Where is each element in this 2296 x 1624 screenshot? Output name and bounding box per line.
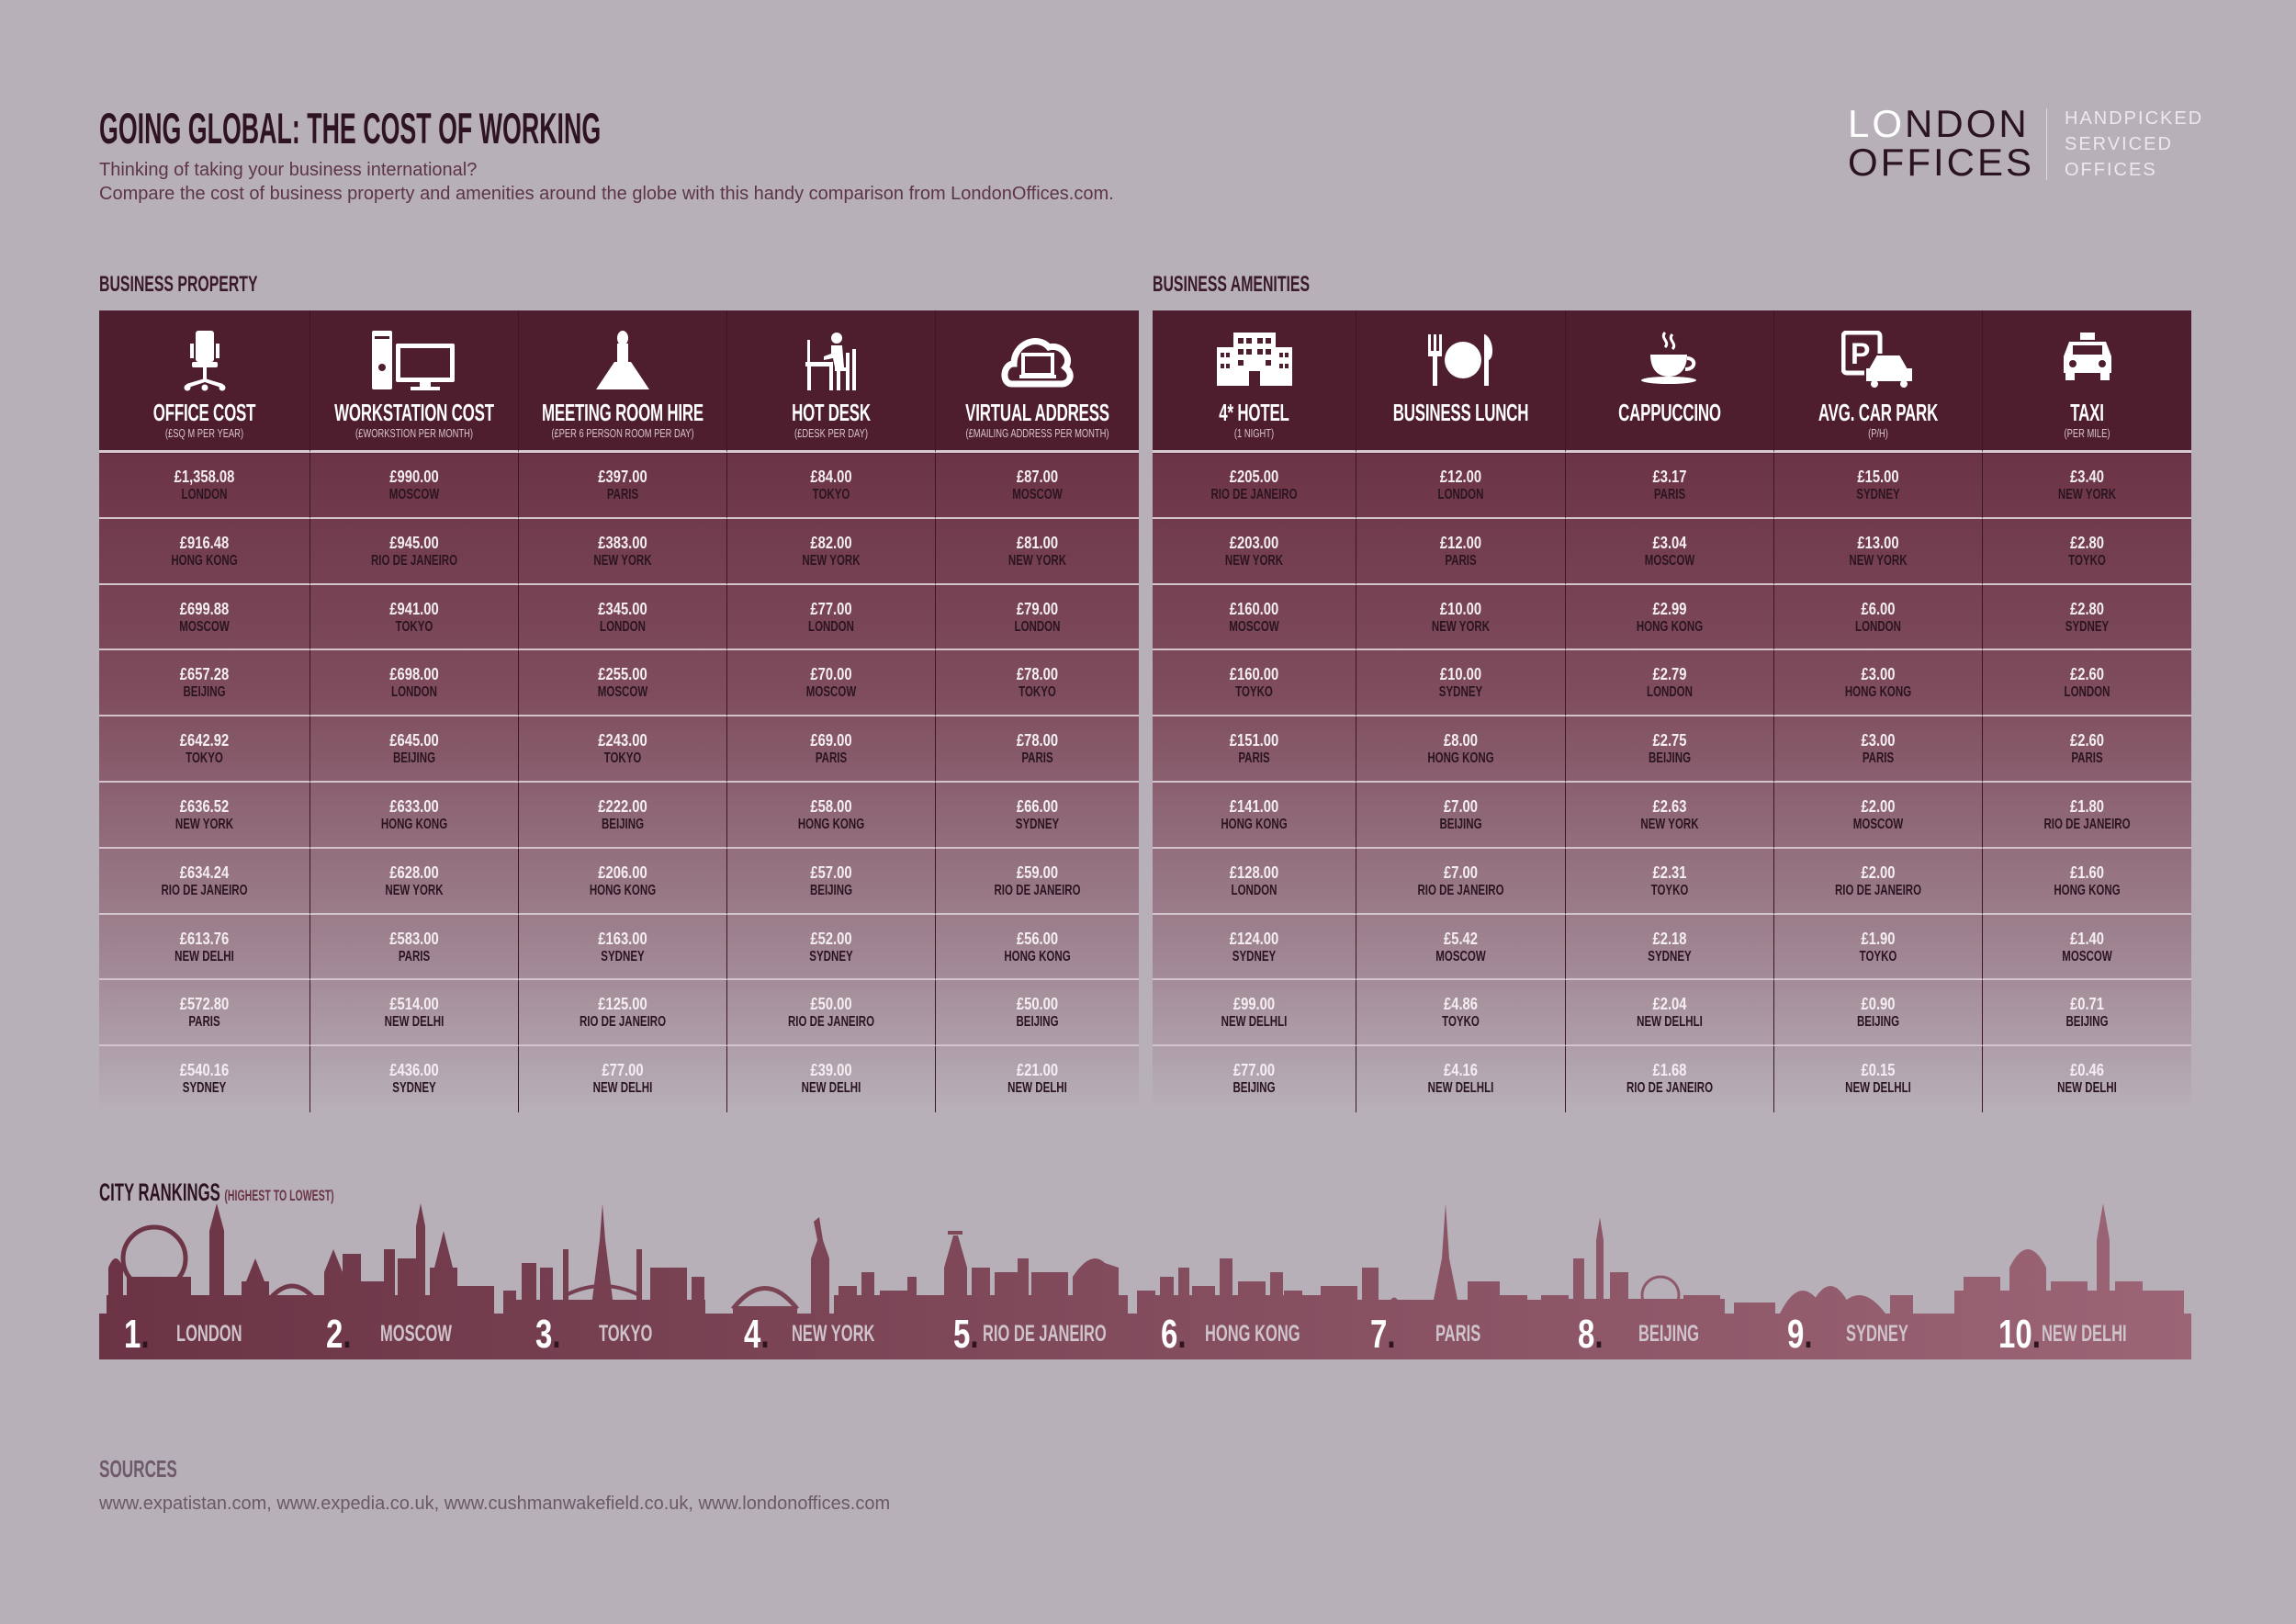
rankings labels: HONG KONG <box>1205 1321 1300 1347</box>
sources text: www.expatistan.com, www.expedia.co.uk, www.cushmanwakefield.co.uk, www.londonoffices.com <box>99 1494 890 1514</box>
table: business property: MOSCOW <box>806 684 856 700</box>
table: business amenities: £2.60 <box>2070 731 2104 750</box>
table: business amenities: £0.90 <box>1862 995 1895 1013</box>
table: business property: £77.00 <box>810 600 852 618</box>
table: business property: £79.00 <box>1017 600 1058 618</box>
table: business property: £698.00 <box>389 665 439 683</box>
table: business property: £645.00 <box>389 731 439 750</box>
table: business property: HONG KONG <box>381 817 447 832</box>
header: 4* hotel: (1 NIGHT) <box>1234 426 1274 440</box>
table: business amenities <box>1153 310 2191 1112</box>
header: virtual address <box>936 310 1139 453</box>
logo: LONDON <box>1848 102 2030 145</box>
header: car park: P <box>1851 337 1870 370</box>
skyline city ranking band <box>99 1203 2191 1359</box>
table: business amenities: £2.00 <box>1862 797 1895 816</box>
table: business property: MOSCOW <box>389 487 439 502</box>
table: business property: £56.00 <box>1017 930 1058 948</box>
table: business amenities: £160.00 <box>1230 600 1278 618</box>
table: business property: £222.00 <box>598 797 647 816</box>
table: business property: £50.00 <box>810 995 852 1013</box>
table: business amenities: £124.00 <box>1230 930 1278 948</box>
table: business property: £945.00 <box>389 534 439 552</box>
table: business property: £77.00 <box>602 1061 644 1079</box>
table: business property: RIO DE JANEIRO <box>580 1014 666 1030</box>
table: business amenities: BEIJING <box>1649 750 1691 766</box>
table: business amenities: NEW DELHLI <box>1221 1014 1287 1030</box>
table: business amenities: £7.00 <box>1444 863 1478 882</box>
table: business amenities: £2.04 <box>1653 995 1686 1013</box>
table: business amenities: £2.63 <box>1653 797 1686 816</box>
table: business property: TOKYO <box>813 487 850 502</box>
table: business amenities: RIO DE JANEIRO <box>1210 487 1298 502</box>
rankings labels: 5. <box>953 1312 979 1357</box>
header: business lunch <box>1356 310 1566 453</box>
table: business property: NEW DELHI <box>1007 1080 1067 1096</box>
table: business property: £125.00 <box>598 995 647 1013</box>
table: business property: £82.00 <box>810 534 852 552</box>
table: business amenities: £0.15 <box>1862 1061 1895 1079</box>
rankings labels: 8. <box>1578 1312 1604 1357</box>
table: business amenities: BEIJING <box>1857 1014 1899 1030</box>
table: business amenities: £2.99 <box>1653 600 1686 618</box>
table: business property: £69.00 <box>810 731 852 750</box>
table: business property: £436.00 <box>389 1061 439 1079</box>
table: business amenities: HONG KONG <box>1637 619 1703 635</box>
table: business property: SYDNEY <box>1016 817 1059 832</box>
table: business amenities: £2.80 <box>2070 600 2104 618</box>
table: business amenities: NEW DELHI <box>2057 1080 2117 1096</box>
table: business property: LONDON <box>1015 619 1060 635</box>
table: business property: £78.00 <box>1017 665 1058 683</box>
rankings labels: NEW YORK <box>792 1321 874 1347</box>
table: business amenities: £2.18 <box>1653 930 1686 948</box>
rankings labels: PARIS <box>1435 1321 1480 1347</box>
table: business property: BEIJING <box>1016 1014 1059 1030</box>
table: business amenities: £15.00 <box>1857 468 1899 486</box>
table: business amenities: £3.04 <box>1653 534 1686 552</box>
rankings labels: 3. <box>535 1312 561 1357</box>
header: meeting room hire: MEETING ROOM HIRE <box>542 399 703 426</box>
table: business amenities: MOSCOW <box>2062 949 2112 964</box>
table: business property: £583.00 <box>389 930 439 948</box>
header: workstation cost <box>310 310 519 453</box>
table: business amenities: £0.71 <box>2070 995 2104 1013</box>
table: business property: LONDON <box>182 487 227 502</box>
table: business amenities: £3.00 <box>1862 665 1895 683</box>
table: business amenities: PARIS <box>1654 487 1685 502</box>
header: meeting room hire: (£PER 6 PERSON ROOM PER DAY) <box>551 426 694 440</box>
table: business amenities: PARIS <box>1863 750 1894 766</box>
table: business property: £243.00 <box>598 731 647 750</box>
table: business property: £633.00 <box>389 797 439 816</box>
table: business amenities: NEW YORK <box>2058 487 2116 502</box>
table: business property: £87.00 <box>1017 468 1058 486</box>
table: business amenities: £99.00 <box>1233 995 1275 1013</box>
header: workstation cost: (£WORKSTION PER MONTH) <box>355 426 473 440</box>
table: business amenities: £13.00 <box>1857 534 1899 552</box>
table: business amenities: £128.00 <box>1230 863 1278 882</box>
header: virtual address: (£MAILING ADDRESS PER MONTH) <box>965 426 1109 440</box>
rankings labels: RIO DE JANEIRO <box>983 1321 1107 1347</box>
table: business property: £628.00 <box>389 863 439 882</box>
table: business amenities: PARIS <box>2071 750 2103 766</box>
table: business amenities: £1.68 <box>1653 1061 1686 1079</box>
table: business amenities: £5.42 <box>1444 930 1478 948</box>
table: business property: HONG KONG <box>1004 949 1071 964</box>
header: virtual address: VIRTUAL ADDRESS <box>965 399 1109 426</box>
table: business property <box>99 310 1139 1112</box>
table: business property: £206.00 <box>598 863 647 882</box>
table: business amenities: £1.90 <box>1862 930 1895 948</box>
table: business property: NEW YORK <box>1008 553 1066 569</box>
table: business property: SYDNEY <box>601 949 645 964</box>
title: GOING GLOBAL: THE COST OF WORKING <box>99 104 601 152</box>
header: hot desk: HOT DESK <box>792 399 871 426</box>
table: business property: £59.00 <box>1017 863 1058 882</box>
logo: OFFICES <box>2065 160 2157 180</box>
table: business amenities: TOYKO <box>1651 883 1688 898</box>
header: office cost <box>99 310 310 453</box>
table: business property: £52.00 <box>810 930 852 948</box>
table: business amenities: LONDON <box>1647 684 1693 700</box>
table: business property: £81.00 <box>1017 534 1058 552</box>
table: business amenities: PARIS <box>1445 553 1477 569</box>
table: business amenities: HONG KONG <box>1221 817 1288 832</box>
table: business amenities: NEW YORK <box>1432 619 1490 635</box>
table: business amenities: PARIS <box>1238 750 1270 766</box>
table: business property: £255.00 <box>598 665 647 683</box>
table: business amenities: LONDON <box>1232 883 1277 898</box>
header: cappuccino <box>1566 310 1774 453</box>
table: business amenities: SYDNEY <box>1232 949 1276 964</box>
logo <box>1848 102 2203 184</box>
table: business amenities: £77.00 <box>1233 1061 1275 1079</box>
table: business amenities: SYDNEY <box>2065 619 2109 635</box>
table: business property: £66.00 <box>1017 797 1058 816</box>
table: business amenities: SYDNEY <box>1439 684 1482 700</box>
table: business amenities: SYDNEY <box>1648 949 1692 964</box>
rankings labels: SYDNEY <box>1846 1321 1908 1347</box>
header: hot desk: (£DESK PER DAY) <box>794 426 868 440</box>
header: office cost: OFFICE COST <box>153 399 255 426</box>
table: business amenities: £12.00 <box>1440 534 1481 552</box>
table: business amenities: HONG KONG <box>1845 684 1911 700</box>
header: workstation cost: WORKSTATION COST <box>334 399 494 426</box>
table: business amenities: TOYKO <box>1860 949 1896 964</box>
table: business amenities: £4.16 <box>1444 1061 1478 1079</box>
logo: OFFICES <box>1848 141 2034 184</box>
table: business amenities: £2.80 <box>2070 534 2104 552</box>
table: business amenities: £8.00 <box>1444 731 1478 750</box>
table: business property: BEIJING <box>602 817 644 832</box>
table: business amenities: NEW YORK <box>1849 553 1908 569</box>
table: business amenities: £2.31 <box>1653 863 1686 882</box>
table: business amenities: £160.00 <box>1230 665 1278 683</box>
table: business amenities: HONG KONG <box>2054 883 2121 898</box>
table: business amenities: MOSCOW <box>1645 553 1694 569</box>
table: business property: HONG KONG <box>798 817 864 832</box>
table: business property: £57.00 <box>810 863 852 882</box>
table: business amenities: £12.00 <box>1440 468 1481 486</box>
rankings labels: 2. <box>326 1312 352 1357</box>
table: business property: NEW YORK <box>385 883 444 898</box>
table: business property: £21.00 <box>1017 1061 1058 1079</box>
table: business property: NEW DELHI <box>385 1014 444 1030</box>
table: business property: £990.00 <box>389 468 439 486</box>
table: business property: £397.00 <box>598 468 647 486</box>
header: 4* hotel <box>1153 310 1356 453</box>
table: business property: £50.00 <box>1017 995 1058 1013</box>
table: business amenities: £2.00 <box>1862 863 1895 882</box>
table: business property: HONG KONG <box>590 883 656 898</box>
table: business property: RIO DE JANEIRO <box>161 883 248 898</box>
header: office cost: (£SQ M PER YEAR) <box>165 426 243 440</box>
table: business property: £613.76 <box>180 930 229 948</box>
table: business property: SYDNEY <box>392 1080 436 1096</box>
table: business property: NEW DELHI <box>174 949 234 964</box>
table: business amenities: £2.75 <box>1653 731 1686 750</box>
rankings labels: 7. <box>1370 1312 1396 1357</box>
table: business property: RIO DE JANEIRO <box>994 883 1081 898</box>
table: business property: £916.48 <box>180 534 229 552</box>
rankings labels: TOKYO <box>599 1321 652 1347</box>
table: business amenities: TOYKO <box>2068 553 2106 569</box>
table: business amenities: £1.40 <box>2070 930 2104 948</box>
table: business amenities: RIO DE JANEIRO <box>1835 883 1921 898</box>
table: business property: MOSCOW <box>598 684 647 700</box>
table: business amenities: BEIJING <box>1439 817 1482 832</box>
table: business property: SYDNEY <box>809 949 853 964</box>
rankings labels <box>124 1312 2127 1357</box>
table: business property: £39.00 <box>810 1061 852 1079</box>
rankings labels: BEIJING <box>1638 1321 1699 1347</box>
logo: SERVICED <box>2065 134 2173 154</box>
table: business amenities: MOSCOW <box>1229 619 1279 635</box>
table: business property: £941.00 <box>389 600 439 618</box>
table: business amenities: BEIJING <box>1232 1080 1276 1096</box>
table: business property: TOKYO <box>604 750 641 766</box>
table: business amenities: £2.60 <box>2070 665 2104 683</box>
header: taxi <box>1983 310 2191 453</box>
table: business property: £345.00 <box>598 600 647 618</box>
table: business property: PARIS <box>816 750 847 766</box>
table: business amenities: £0.46 <box>2070 1061 2104 1079</box>
table: business amenities: £6.00 <box>1862 600 1895 618</box>
table: business amenities: £141.00 <box>1230 797 1278 816</box>
table: business amenities: RIO DE JANEIRO <box>1626 1080 1713 1096</box>
header: taxi: (PER MILE) <box>2065 426 2110 440</box>
table: business property: RIO DE JANEIRO <box>788 1014 874 1030</box>
table: business amenities: £1.80 <box>2070 797 2104 816</box>
subtitle: Compare the cost of business property and amenities around the globe with this handy comparison from LondonOffices.com. <box>99 184 1114 204</box>
table: business property: BEIJING <box>183 684 226 700</box>
table: business amenities: SYDNEY <box>1856 487 1900 502</box>
header: meeting room hire <box>519 310 727 453</box>
table: business amenities: MOSCOW <box>1853 817 1903 832</box>
table: business amenities: £3.17 <box>1653 468 1686 486</box>
table: business property: £572.80 <box>180 995 229 1013</box>
table: business amenities: £151.00 <box>1230 731 1278 750</box>
table: business property: LONDON <box>808 619 854 635</box>
table: business amenities: HONG KONG <box>1427 750 1494 766</box>
table: business amenities: £203.00 <box>1230 534 1278 552</box>
table: business amenities: £4.86 <box>1444 995 1478 1013</box>
header: car park <box>1774 310 1983 453</box>
table: business amenities: MOSCOW <box>1435 949 1486 964</box>
subtitle: Thinking of taking your business international? <box>99 160 477 180</box>
table: business amenities: NEW DELHLI <box>1428 1080 1493 1096</box>
table: business property: TOKYO <box>186 750 223 766</box>
table: business amenities: LONDON <box>2065 684 2110 700</box>
table: business property: MOSCOW <box>1012 487 1063 502</box>
subtitle <box>99 160 1114 204</box>
header: cappuccino: CAPPUCCINO <box>1618 399 1721 426</box>
table: business property: £383.00 <box>598 534 647 552</box>
table: business property: LONDON <box>600 619 646 635</box>
table: business property: NEW YORK <box>593 553 652 569</box>
table: business property: NEW DELHI <box>593 1080 652 1096</box>
table: business amenities: NEW YORK <box>1640 817 1699 832</box>
table: business amenities: LONDON <box>1438 487 1483 502</box>
rankings labels: 10. <box>1998 1312 2041 1357</box>
table: business property: HONG KONG <box>171 553 238 569</box>
logo: HANDPICKED <box>2065 108 2203 129</box>
table: business property: £78.00 <box>1017 731 1058 750</box>
table: business property: PARIS <box>607 487 638 502</box>
table: business amenities: £10.00 <box>1440 665 1481 683</box>
table: business property: NEW YORK <box>802 553 861 569</box>
header: taxi: TAXI <box>2070 399 2104 426</box>
rankings labels: 6. <box>1161 1312 1187 1357</box>
table: business property: £634.24 <box>180 863 229 882</box>
table: business property: £1,358.08 <box>174 468 234 486</box>
table: business property: NEW YORK <box>175 817 233 832</box>
table: business amenities: BEIJING <box>2065 1014 2109 1030</box>
table: business amenities: NEW YORK <box>1225 553 1283 569</box>
table: business amenities: £1.60 <box>2070 863 2104 882</box>
table: business amenities: £10.00 <box>1440 600 1481 618</box>
rankings labels: NEW DELHI <box>2042 1321 2127 1347</box>
header: hot desk <box>727 310 936 453</box>
table: business property: PARIS <box>188 1014 220 1030</box>
table: business property: £642.92 <box>180 731 229 750</box>
heading: city rankings: CITY RANKINGS (HIGHEST TO LOWEST) <box>99 1179 334 1206</box>
table: business property: SYDNEY <box>183 1080 226 1096</box>
rankings labels: 9. <box>1787 1312 1813 1357</box>
table: business amenities: £3.00 <box>1862 731 1895 750</box>
table: business amenities: NEW DELHLI <box>1637 1014 1703 1030</box>
table: business property: TOKYO <box>1019 684 1056 700</box>
table: business amenities: RIO DE JANEIRO <box>2043 817 2131 832</box>
table: business property: £163.00 <box>598 930 647 948</box>
table: business property: PARIS <box>1021 750 1053 766</box>
table: business property: £699.88 <box>180 600 229 618</box>
table: business property: MOSCOW <box>179 619 230 635</box>
header: car park: AVG. CAR PARK <box>1818 399 1938 426</box>
table: business property: £70.00 <box>810 665 852 683</box>
table: business property: £84.00 <box>810 468 852 486</box>
heading: business amenities: BUSINESS AMENITIES <box>1153 272 1310 297</box>
header: car park: (P/H) <box>1868 426 1888 440</box>
rankings labels: 1. <box>124 1312 150 1357</box>
table: business property: NEW DELHI <box>802 1080 861 1096</box>
table: business property: PARIS <box>399 949 430 964</box>
table: business amenities: £3.40 <box>2070 468 2104 486</box>
table: business amenities: TOYKO <box>1235 684 1273 700</box>
table: business property: BEIJING <box>393 750 435 766</box>
table: business property: LONDON <box>391 684 437 700</box>
header: business lunch: BUSINESS LUNCH <box>1393 399 1528 426</box>
sources heading: SOURCES <box>99 1455 177 1483</box>
table: business amenities: RIO DE JANEIRO <box>1417 883 1504 898</box>
heading: business property: BUSINESS PROPERTY <box>99 272 258 297</box>
table: business amenities: NEW DELHLI <box>1845 1080 1911 1096</box>
table: business amenities: £2.79 <box>1653 665 1686 683</box>
table: business property: £58.00 <box>810 797 852 816</box>
table: business amenities: TOYKO <box>1442 1014 1480 1030</box>
table: business amenities: £7.00 <box>1444 797 1478 816</box>
rankings labels: MOSCOW <box>380 1321 452 1347</box>
table: business property: BEIJING <box>810 883 852 898</box>
table: business property: £514.00 <box>389 995 439 1013</box>
rankings labels: LONDON <box>176 1321 242 1347</box>
table: business property: RIO DE JANEIRO <box>371 553 457 569</box>
table: business amenities: LONDON <box>1855 619 1901 635</box>
header: 4* hotel: 4* HOTEL <box>1219 399 1289 426</box>
table: business property: £636.52 <box>180 797 229 816</box>
rankings labels: 4. <box>744 1312 770 1357</box>
table: business amenities: £205.00 <box>1230 468 1278 486</box>
table: business property: £657.28 <box>180 665 229 683</box>
table: business property: £540.16 <box>180 1061 229 1079</box>
table: business property: TOKYO <box>396 619 433 635</box>
